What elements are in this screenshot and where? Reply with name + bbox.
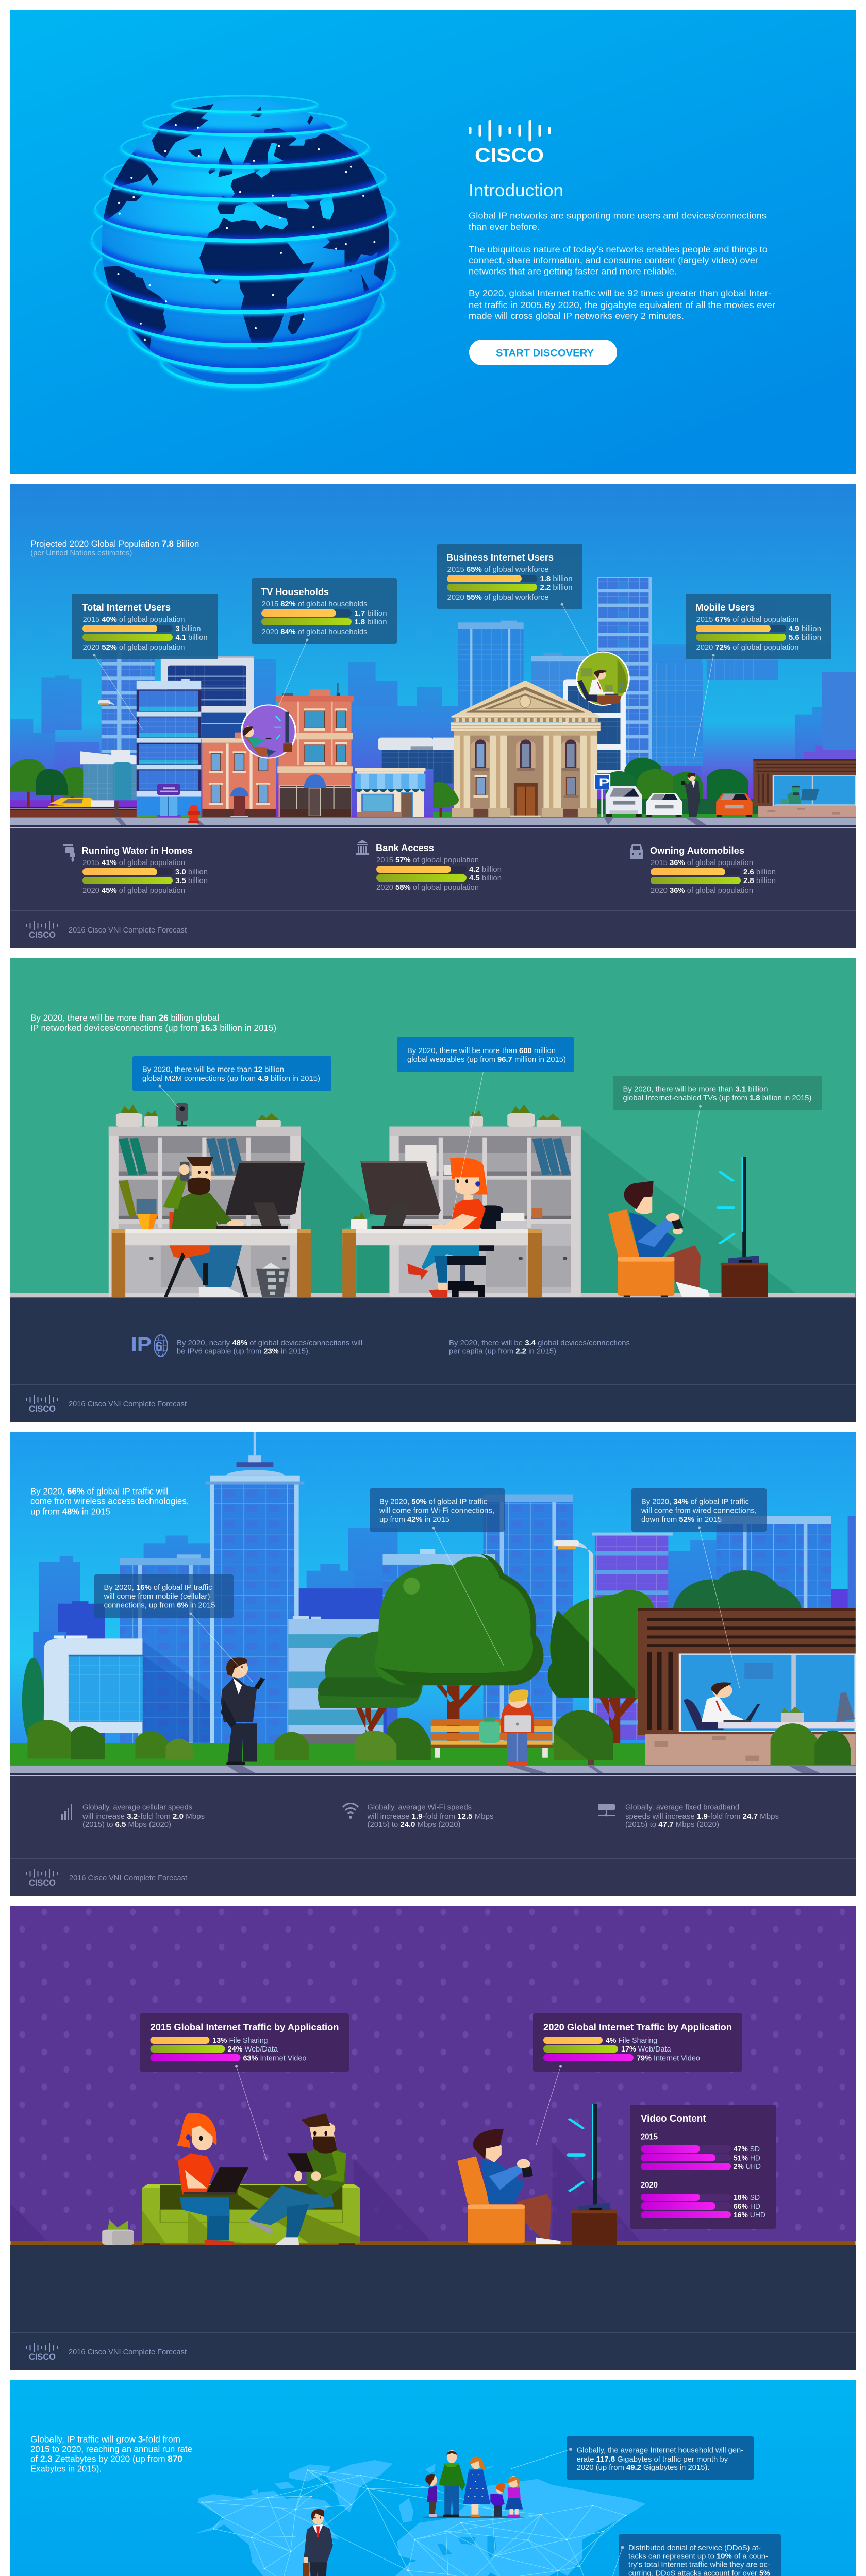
bushes bbox=[28, 1710, 851, 1765]
chart panel: video content: Video Content bbox=[641, 2113, 706, 2124]
bookshelf left bbox=[109, 1127, 301, 1297]
park scene bbox=[22, 1432, 856, 1757]
brown office with worker bbox=[638, 1608, 856, 1765]
button: start discovery: START DISCOVERY bbox=[496, 348, 594, 359]
building: bank bbox=[433, 681, 601, 818]
text block: wireless traffic: come from wireless access technologies, bbox=[30, 1496, 189, 1506]
callout: internet-enabled TVs: global Internet-enabled TVs (up from 1.8 billion in 2015) bbox=[623, 1094, 811, 1103]
world map with network bbox=[193, 2460, 646, 2576]
chart panel: video content: 2% UHD bbox=[734, 2163, 761, 2171]
dark info band bbox=[10, 828, 856, 948]
callout: business internet users: 1.8 billion bbox=[540, 575, 572, 583]
callout: internet-enabled TVs: By 2020, there will be more than 3.1 billion bbox=[623, 1086, 768, 1094]
callout: business internet users: 2.2 billion bbox=[540, 584, 572, 592]
gamer in armchair bbox=[457, 2129, 560, 2244]
trees bbox=[318, 1554, 802, 1757]
text: IPv6 capable: By 2020, nearly 48% of global devices/connections will bbox=[177, 1339, 362, 1347]
stat: Wi-Fi speeds: will increase 1.9-fold from 12.5 Mbps bbox=[367, 1812, 494, 1821]
leader lines city bbox=[93, 603, 714, 759]
man with tablet bbox=[248, 2113, 346, 2248]
text block: IP traffic growth: Exabytes in 2015). bbox=[30, 2463, 102, 2473]
callout: wearables: By 2020, there will be more than 600 million bbox=[407, 1047, 556, 1055]
dark info band bbox=[10, 1298, 856, 1422]
panel: devices office bbox=[9, 958, 856, 1422]
leader lines map bbox=[252, 2448, 624, 2576]
panel: video traffic living room bbox=[10, 1906, 856, 2370]
stat: bank access: 2020 58% of global population bbox=[376, 884, 479, 892]
text: IPv6 capable: be IPv6 capable (up from 23% in 2015). bbox=[177, 1348, 310, 1356]
text block: introduction body: made will cross global IP networks every 2 minutes. bbox=[469, 311, 684, 321]
footer: 2016 Cisco VNI Complete Forecast bbox=[69, 1874, 187, 1883]
stat: bank access: 4.2 billion bbox=[469, 866, 502, 874]
dark floor bbox=[10, 2245, 856, 2370]
text block: wireless traffic bbox=[30, 1486, 189, 1517]
footer: CISCO bbox=[29, 1878, 56, 1888]
building: awning shop and back office bbox=[355, 738, 433, 818]
icon: IPv6 bbox=[131, 1334, 168, 1357]
callout: mobile users: Mobile Users bbox=[695, 602, 755, 613]
chart panel: 2020 traffic by application bbox=[533, 2013, 742, 2072]
chart panel: 2015 traffic by application bbox=[140, 2013, 349, 2072]
callout: Wi-Fi traffic: By 2020, 50% of global IP traffic bbox=[379, 1498, 487, 1506]
TV and cabinet bbox=[567, 2104, 618, 2245]
building: left towers bbox=[80, 656, 255, 801]
callout: total internet users bbox=[72, 594, 218, 659]
stat: fixed broadband speeds: (2015) to 47.7 Mbps (2020) bbox=[625, 1821, 719, 1829]
text block: IP traffic growth: Globally, IP traffic will grow 3-fold from bbox=[30, 2434, 180, 2444]
callout: mobile traffic: connections, up from 6% in 2015 bbox=[104, 1601, 215, 1609]
footer: CISCO bbox=[29, 2352, 56, 2362]
dark info band bbox=[10, 1776, 856, 1896]
text block: introduction body: Global IP networks are supporting more users and devices/connections bbox=[469, 211, 767, 221]
footer: 2016 Cisco VNI Complete Forecast bbox=[69, 1400, 187, 1409]
callout: mobile traffic: will come from mobile (cellular) bbox=[103, 1592, 210, 1601]
woman with laptop bbox=[177, 2113, 248, 2249]
callout: wearables: global wearables (up from 96.7 million in 2015) bbox=[407, 1056, 566, 1064]
footer: CISCO bbox=[29, 1404, 56, 1414]
building: brick houses bbox=[202, 683, 354, 818]
icon: router bbox=[598, 1804, 615, 1817]
text: devices per capita: By 2020, there will be 3.4 global devices/connections bbox=[449, 1339, 630, 1347]
chart panel: video content: 2015 bbox=[641, 2133, 658, 2142]
panel: global traffic map bbox=[10, 2380, 856, 2576]
callout: DDoS attacks: try’s total Internet traffic while they are oc- bbox=[628, 2561, 770, 2569]
man with phone bbox=[221, 1657, 265, 1766]
callout: M2M connections: By 2020, there will be more than 12 billion bbox=[142, 1066, 284, 1074]
icon: man with phone bbox=[681, 773, 700, 822]
towers bbox=[120, 1432, 831, 1745]
callout: mobile users: 2020 72% of global population bbox=[696, 643, 799, 652]
plants on shelf and camera bbox=[116, 1103, 281, 1127]
icon: glowing globe with rings bbox=[92, 96, 398, 388]
heading: Introduction: Introduction bbox=[469, 181, 563, 200]
callout: mobile users bbox=[686, 594, 831, 659]
stat: owning automobiles: 2.8 billion bbox=[743, 877, 776, 885]
wastebasket bbox=[256, 1263, 289, 1297]
building: front blue office bbox=[137, 679, 201, 818]
icon: Cisco logo: CISCO bbox=[475, 145, 544, 166]
text block: introduction body: By 2020, global Internet traffic will be 92 times greater than global Inter- bbox=[469, 288, 771, 298]
monitor left bbox=[216, 1161, 305, 1229]
footer bbox=[10, 2332, 856, 2362]
trees and fence left bbox=[10, 700, 137, 818]
grass bbox=[10, 1743, 649, 1765]
chart panel: 2020 traffic by application: 79% Internet Video bbox=[637, 2055, 700, 2063]
callout: business internet users: 2015 65% of global workforce bbox=[447, 566, 548, 574]
text block: total devices bbox=[30, 1013, 276, 1033]
leader lines park bbox=[190, 1526, 740, 1688]
stat: running water in homes: 2015 41% of global population bbox=[82, 859, 185, 867]
chart panel: 2020 traffic by application: 2020 Global Internet Traffic by Application bbox=[543, 2022, 732, 2032]
text block: introduction body: net traffic in 2005.By 2020, the gigabyte equivalent of all the movies ever bbox=[469, 300, 775, 310]
woman at computer bbox=[428, 1158, 527, 1231]
icon: tap bbox=[63, 844, 75, 862]
icon: IPv6: IP bbox=[131, 1334, 152, 1355]
callout: wired traffic: will come from wired connections, bbox=[641, 1507, 757, 1515]
callout: TV households: 2020 84% of global households bbox=[262, 628, 367, 636]
icon: TV viewer vignette bbox=[242, 705, 295, 758]
bookshelf right bbox=[351, 1104, 581, 1297]
text block: introduction body: connect, share information, and consume content (largely video) over bbox=[469, 255, 758, 265]
stat: bank access bbox=[356, 840, 502, 892]
chart panel: video content: 18% SD bbox=[734, 2194, 760, 2202]
callout: wired traffic: By 2020, 34% of global IP traffic bbox=[641, 1498, 749, 1506]
callout: internet-enabled TVs bbox=[613, 1076, 822, 1110]
stat: bank access: 4.5 billion bbox=[469, 874, 502, 883]
callout: TV households: TV Households bbox=[261, 587, 329, 597]
panel: wireless park bbox=[10, 1432, 856, 1896]
icon: wifi bbox=[343, 1803, 358, 1818]
stat: cellular speeds: (2015) to 6.5 Mbps (2020) bbox=[82, 1821, 171, 1829]
callout: Wi-Fi traffic: will come from Wi-Fi connections, bbox=[379, 1507, 494, 1515]
building: blue towers and back buildings (right) bbox=[458, 577, 856, 773]
stat: owning automobiles bbox=[630, 844, 776, 895]
callout: DDoS attacks bbox=[619, 2534, 781, 2576]
plant bbox=[102, 2219, 134, 2245]
callout: TV households: 2015 82% of global households bbox=[262, 600, 367, 608]
text block: IP traffic growth: of 2.3 Zettabytes by 2020 (up from 870 bbox=[30, 2453, 182, 2464]
callout: business internet users bbox=[437, 544, 582, 609]
callout: TV households: 1.7 billion bbox=[355, 609, 387, 618]
callout: mobile users: 4.9 billion bbox=[789, 625, 821, 633]
text block: introduction body: than ever before. bbox=[469, 222, 540, 232]
chart panel: video content: 47% SD bbox=[734, 2145, 760, 2154]
leader lines office bbox=[159, 1072, 702, 1219]
text block: wireless traffic: up from 48% in 2015 bbox=[30, 1506, 110, 1517]
TV and cabinet bbox=[717, 1157, 768, 1297]
text block: IP traffic growth: 2015 to 2020, reaching an annual run rate bbox=[30, 2444, 192, 2454]
chart panel: 2015 traffic by application: 2015 Global Internet Traffic by Application bbox=[151, 2022, 339, 2032]
stat: fixed broadband speeds: Globally, average fixed broadband bbox=[625, 1804, 739, 1812]
callout: mobile users: 2015 67% of global population bbox=[696, 616, 799, 624]
text block: introduction body: The ubiquitous nature of today’s networks enables people and things to bbox=[469, 244, 768, 255]
icon: signal bars bbox=[61, 1804, 72, 1820]
stat: fixed broadband speeds bbox=[598, 1804, 779, 1829]
callout: Wi-Fi traffic bbox=[370, 1488, 505, 1532]
text: devices per capita: per capita (up from 2.2 in 2015) bbox=[449, 1348, 556, 1356]
callout: total internet users: 3 billion bbox=[175, 625, 201, 633]
stat: running water in homes: 2020 45% of global population bbox=[82, 887, 185, 895]
text block: projected population: Projected 2020 Global Population 7.8 Billion bbox=[30, 539, 199, 549]
icon: businessman bbox=[302, 2509, 335, 2576]
callout: TV households: 1.8 billion bbox=[355, 618, 387, 626]
lamp post bbox=[554, 1540, 594, 1766]
callout: total internet users: 4.1 billion bbox=[175, 634, 207, 642]
monitor right bbox=[360, 1161, 441, 1229]
road bbox=[10, 1765, 856, 1776]
chart panel: video content: 51% HD bbox=[734, 2155, 760, 2163]
stat: Wi-Fi speeds: Globally, average Wi-Fi speeds bbox=[367, 1804, 472, 1812]
fire hydrant bbox=[188, 805, 200, 823]
desk left bbox=[112, 1229, 311, 1297]
callout: business internet users: 2020 55% of global workforce bbox=[447, 594, 548, 602]
stat: bank access: 2015 57% of global population bbox=[376, 856, 479, 865]
gamer in armchair bbox=[608, 1181, 710, 1297]
chart panel: 2015 traffic by application: 24% Web/Data bbox=[228, 2045, 278, 2054]
icon: Cisco logo bbox=[469, 120, 551, 166]
callout: total internet users: 2015 40% of global population bbox=[82, 616, 185, 624]
text: devices per capita bbox=[449, 1339, 630, 1356]
footer bbox=[10, 1384, 856, 1414]
stat: owning automobiles: 2020 36% of global population bbox=[651, 887, 753, 895]
building: glass-front office with worker bbox=[753, 759, 856, 817]
callout: TV households bbox=[252, 578, 397, 644]
chart panel: 2020 traffic by application: 4% File Sharing bbox=[606, 2037, 657, 2045]
desk right bbox=[342, 1229, 542, 1297]
panel: introduction bbox=[10, 10, 856, 474]
footer: 2016 Cisco VNI Complete Forecast bbox=[69, 926, 187, 935]
footer bbox=[10, 1858, 856, 1888]
man on phone bbox=[163, 1157, 244, 1229]
callout: M2M connections bbox=[132, 1056, 331, 1091]
text block: total devices: By 2020, there will be more than 26 billion global bbox=[30, 1013, 219, 1023]
text block: projected population bbox=[30, 539, 199, 557]
stat: bank access: Bank Access bbox=[376, 843, 434, 853]
callout: Wi-Fi traffic: up from 42% in 2015 bbox=[379, 1516, 449, 1524]
trees, parking and cars right bbox=[433, 758, 759, 818]
callout: average household: Globally, the average Internet household will gen- bbox=[577, 2447, 743, 2455]
callout: average household bbox=[567, 2436, 754, 2480]
icon: bank bbox=[356, 840, 369, 855]
callout: business internet users: Business Internet Users bbox=[446, 552, 554, 563]
callout: mobile traffic bbox=[94, 1574, 234, 1618]
stat: running water in homes: 3.0 billion bbox=[175, 868, 208, 876]
text block: introduction body bbox=[469, 211, 775, 321]
stat: Wi-Fi speeds bbox=[343, 1803, 494, 1829]
callout: mobile users: 5.6 billion bbox=[789, 634, 821, 642]
text block: IP traffic growth bbox=[30, 2434, 192, 2473]
callout: mobile traffic: By 2020, 16% of global IP traffic bbox=[104, 1584, 212, 1592]
city skyline silhouettes bbox=[10, 644, 856, 815]
office scene bbox=[9, 1103, 855, 1297]
stat: Wi-Fi speeds: (2015) to 24.0 Mbps (2020) bbox=[367, 1821, 461, 1829]
stat: running water in homes bbox=[63, 844, 208, 895]
bench with person and backpack bbox=[431, 1689, 554, 1767]
callout: DDoS attacks: Distributed denial of service (DDoS) at- bbox=[628, 2544, 761, 2552]
chart panel: video content: 66% HD bbox=[734, 2202, 760, 2211]
mid building bbox=[288, 1616, 384, 1743]
chart panel: 2015 traffic by application: 13% File Sharing bbox=[212, 2037, 268, 2045]
stat: owning automobiles: 2.6 billion bbox=[743, 868, 776, 876]
callout: total internet users: Total Internet Users bbox=[82, 602, 171, 613]
panel: population city bbox=[10, 484, 856, 948]
stat: owning automobiles: Owning Automobiles bbox=[650, 845, 744, 856]
text block: introduction body: networks that are getting faster and more reliable. bbox=[469, 266, 677, 277]
footer bbox=[10, 910, 856, 940]
icon: car bbox=[630, 844, 643, 859]
stat: cellular speeds: Globally, average cellular speeds bbox=[82, 1804, 192, 1812]
callout: average household: 2020 (up from 49.2 Gigabytes in 2015). bbox=[577, 2464, 710, 2472]
text: IPv6 capable bbox=[177, 1339, 362, 1356]
stat: fixed broadband speeds: speeds will increase 1.9-fold from 24.7 Mbps bbox=[625, 1812, 779, 1821]
text block: projected population: (per United Nations estimates) bbox=[30, 549, 132, 557]
left low building and cypress bbox=[22, 1635, 210, 1743]
stat: running water in homes: Running Water in Homes bbox=[82, 845, 193, 856]
stat: cellular speeds bbox=[61, 1804, 205, 1829]
skyline silhouettes bbox=[39, 1528, 735, 1745]
text block: wireless traffic: By 2020, 66% of global IP traffic will bbox=[30, 1486, 168, 1496]
stat: running water in homes: 3.5 billion bbox=[175, 877, 208, 885]
callout: wired traffic: down from 52% in 2015 bbox=[641, 1516, 722, 1524]
chart panel: video content: 2020 bbox=[641, 2181, 658, 2190]
button: start discovery bbox=[469, 340, 617, 365]
callout: total internet users: 2020 52% of global population bbox=[82, 643, 185, 652]
icon: IPv6: 6 bbox=[155, 1338, 162, 1354]
icon: family bbox=[421, 2450, 527, 2518]
icon: office worker vignette bbox=[577, 652, 629, 705]
stat: cellular speeds: will increase 3.2-fold from 2.0 Mbps bbox=[82, 1812, 205, 1821]
callout: average household: erate 117.8 Gigabytes of traffic per month by bbox=[577, 2455, 728, 2464]
footer: CISCO bbox=[29, 930, 56, 940]
text block: total devices: IP networked devices/connections (up from 16.3 billion in 2015) bbox=[30, 1023, 276, 1033]
chart panel: video content bbox=[630, 2105, 776, 2229]
footer: 2016 Cisco VNI Complete Forecast bbox=[69, 2348, 187, 2357]
leader lines living room bbox=[235, 2065, 562, 2161]
stat: owning automobiles: 2015 36% of global population bbox=[651, 859, 753, 867]
chart panel: 2020 traffic by application: 17% Web/Data bbox=[621, 2045, 671, 2054]
chart panel: video content: 16% UHD bbox=[734, 2211, 765, 2219]
callout: DDoS attacks: tacks can represent up to 10% of a coun- bbox=[628, 2552, 768, 2561]
living room scene bbox=[10, 2104, 856, 2249]
chart panel: 2015 traffic by application: 63% Internet Video bbox=[243, 2055, 306, 2063]
callout: M2M connections: global M2M connections (up from 4.9 billion in 2015) bbox=[142, 1075, 320, 1083]
callout: wearables bbox=[397, 1037, 574, 1072]
callout: wired traffic bbox=[631, 1488, 767, 1532]
road bbox=[10, 817, 856, 828]
sofa bbox=[142, 2184, 360, 2245]
trees, parking and cars right: P bbox=[599, 776, 610, 788]
